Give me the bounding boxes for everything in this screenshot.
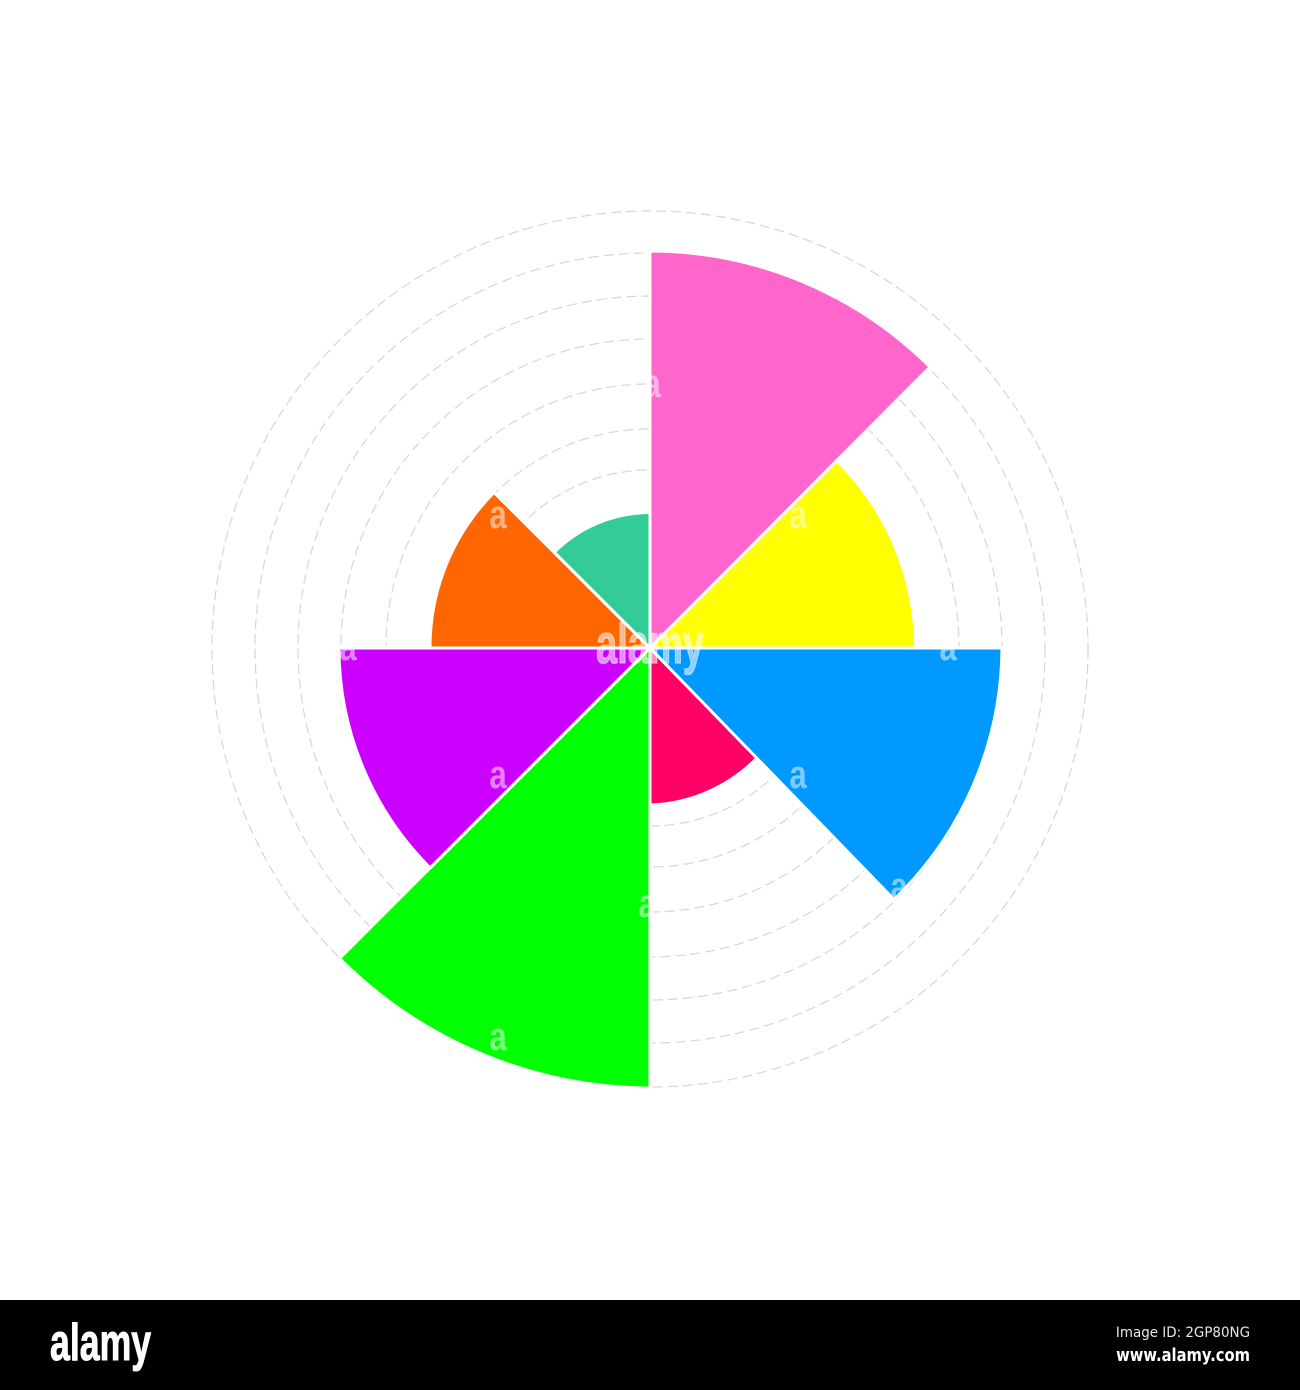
sector: green (340, 648, 650, 1088)
footer url: www.alamy.com (1116, 1345, 1250, 1365)
watermark fragments: a (489, 492, 508, 537)
watermark fragments: a (339, 624, 358, 669)
watermark fragments: a (643, 361, 662, 406)
footer image id: Image ID: 2GP80NG (1116, 1325, 1250, 1341)
sector: pink (650, 251, 930, 648)
sector: orange (430, 492, 650, 648)
watermark fragments (339, 361, 958, 1059)
sector: blue (650, 648, 1002, 900)
watermark: alamy: alamy (596, 614, 704, 676)
watermark fragments: a (789, 752, 808, 797)
watermark fragments: a (638, 881, 657, 926)
sector: teal (554, 512, 650, 648)
watermark fragments: a (489, 752, 508, 797)
sector: yellow (650, 460, 916, 648)
center white dot (646, 644, 654, 652)
sector: crimson (650, 648, 757, 805)
polar sectors (339, 251, 1002, 1088)
sector: purple (339, 648, 650, 868)
footer logo: alamy: alamy (50, 1315, 151, 1372)
watermark fragments: a (939, 624, 958, 669)
watermark fragments: a (489, 1014, 508, 1059)
footer bar (0, 1300, 1300, 1390)
watermark fragments: a (890, 864, 909, 909)
watermark fragments: a (789, 492, 808, 537)
